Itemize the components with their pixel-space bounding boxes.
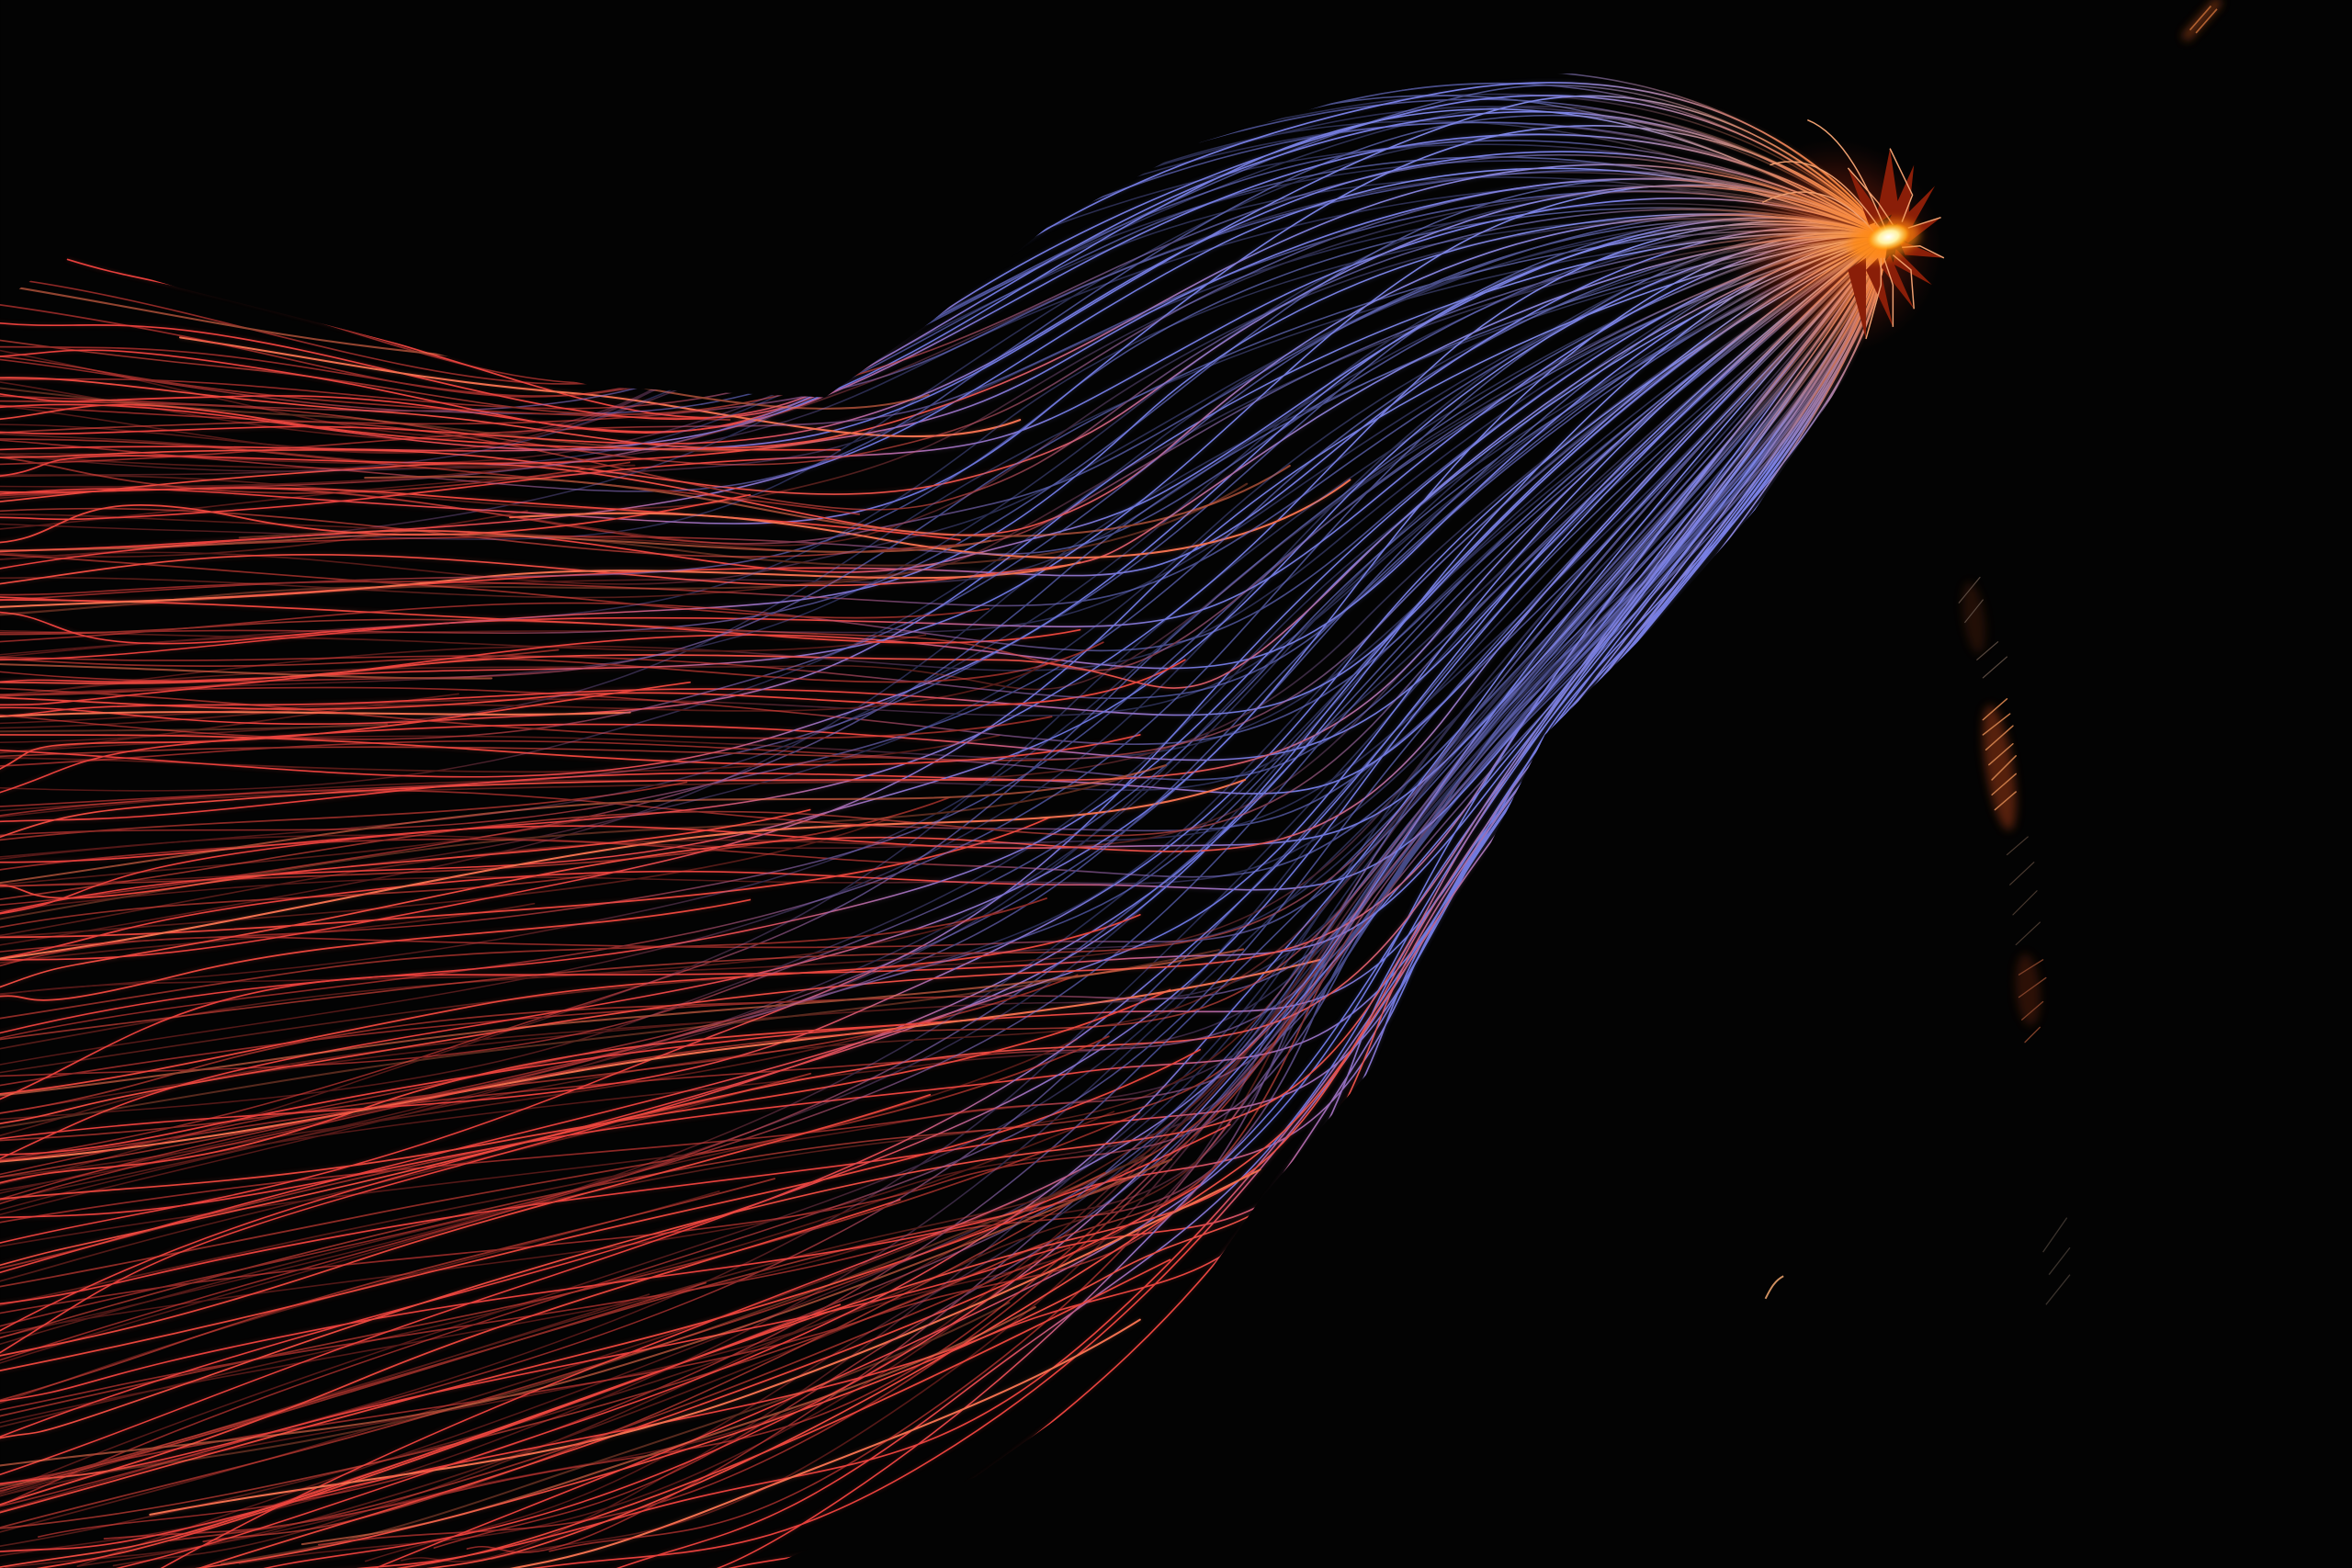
bright white-yellow core (1863, 219, 1914, 255)
fireworks head: glowing burst with spikes (1762, 120, 1944, 339)
distant ember streak on the right (1959, 578, 2046, 1043)
ember fleck at top right (2187, 3, 2217, 36)
dark red mass around the burst, screened over the strands (1725, 140, 1941, 355)
faint spark cluster at lower right (2043, 1218, 2070, 1304)
small spark near the bottom (1766, 1276, 1783, 1299)
